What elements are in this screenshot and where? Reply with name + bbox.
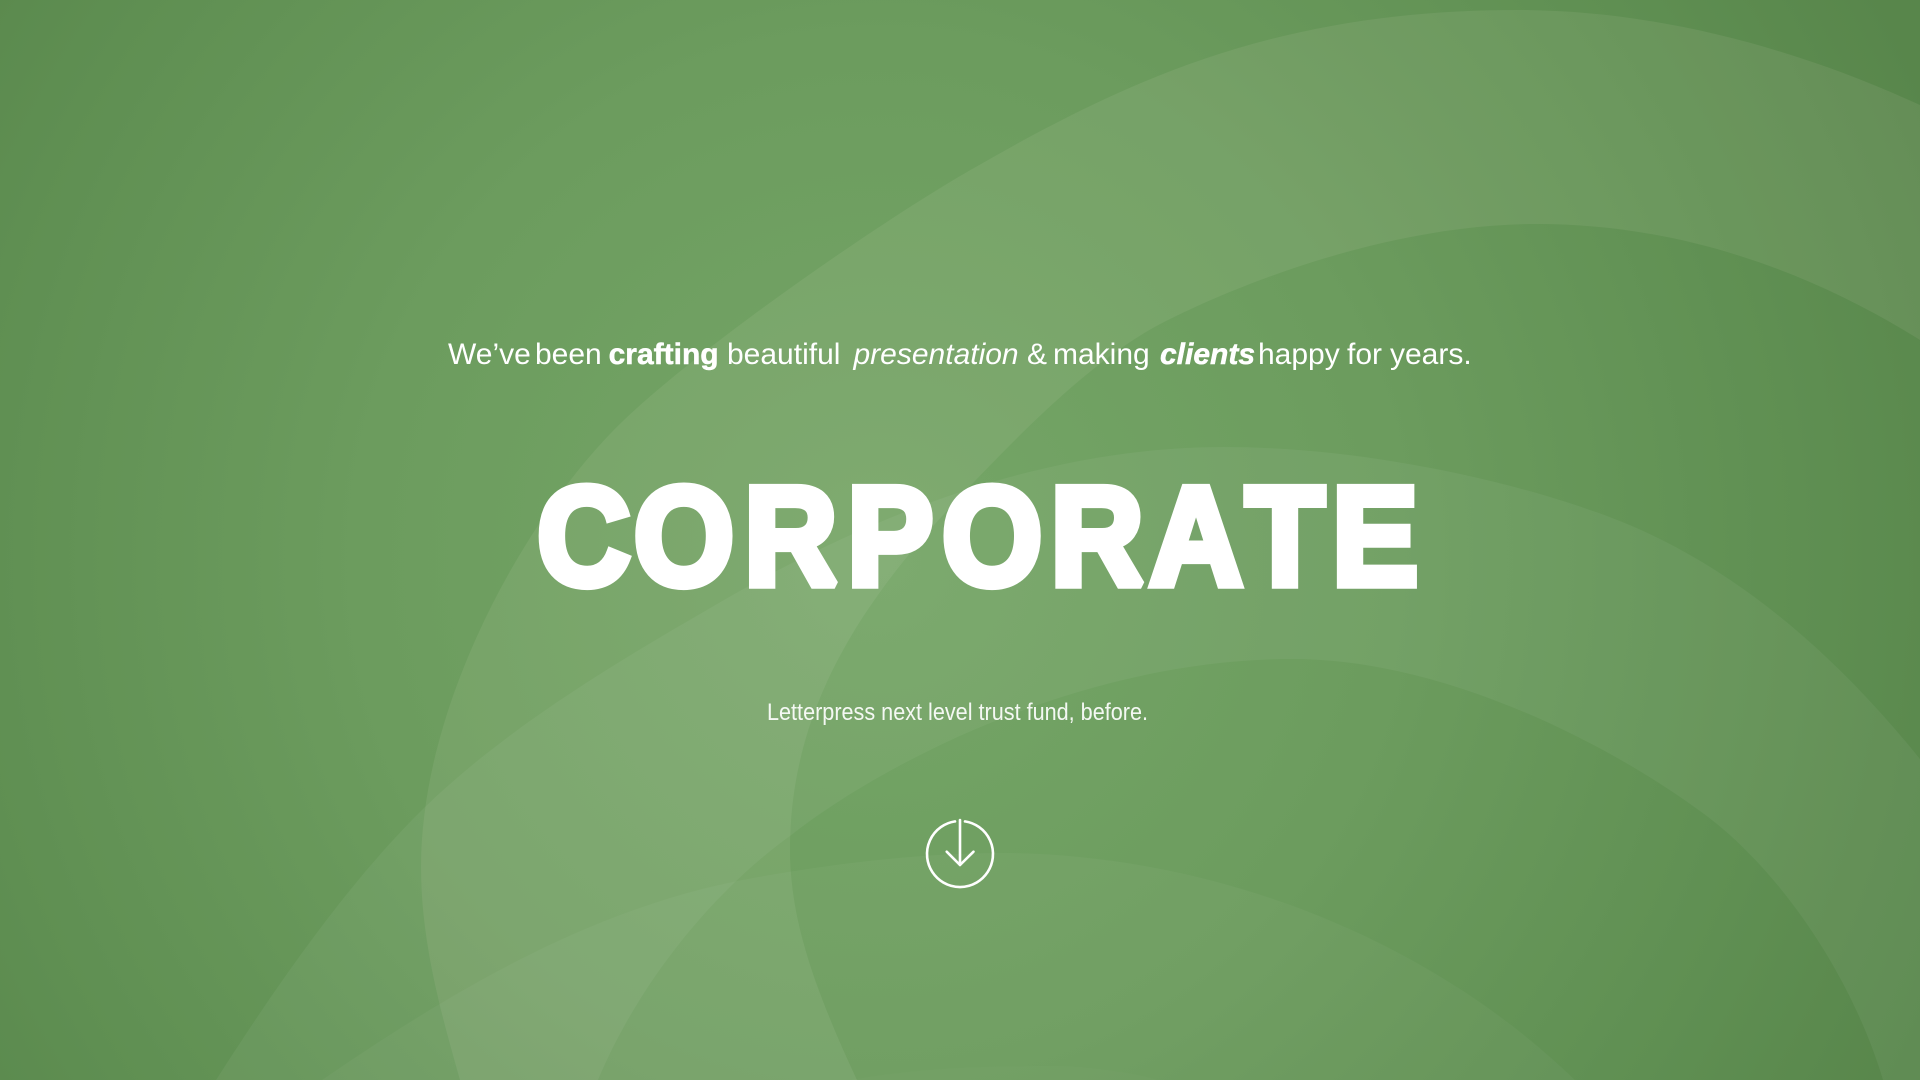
title: CORPORATE bbox=[537, 458, 1418, 615]
subtitle: Letterpress next level trust fund, before. bbox=[767, 699, 1148, 726]
tagline: happy bbox=[1258, 338, 1340, 371]
tagline: making bbox=[1053, 338, 1150, 371]
tagline: presentation bbox=[852, 338, 1019, 371]
tagline: for bbox=[1347, 338, 1382, 371]
tagline: beautiful bbox=[727, 338, 840, 371]
icon: down arrow in circle bbox=[927, 820, 993, 887]
tagline: clients bbox=[1160, 338, 1255, 371]
tagline: & bbox=[1027, 338, 1047, 371]
tagline: been bbox=[535, 338, 602, 371]
tagline: We’ve bbox=[448, 338, 531, 371]
tagline: crafting bbox=[609, 338, 719, 371]
tagline: years. bbox=[1390, 338, 1472, 371]
